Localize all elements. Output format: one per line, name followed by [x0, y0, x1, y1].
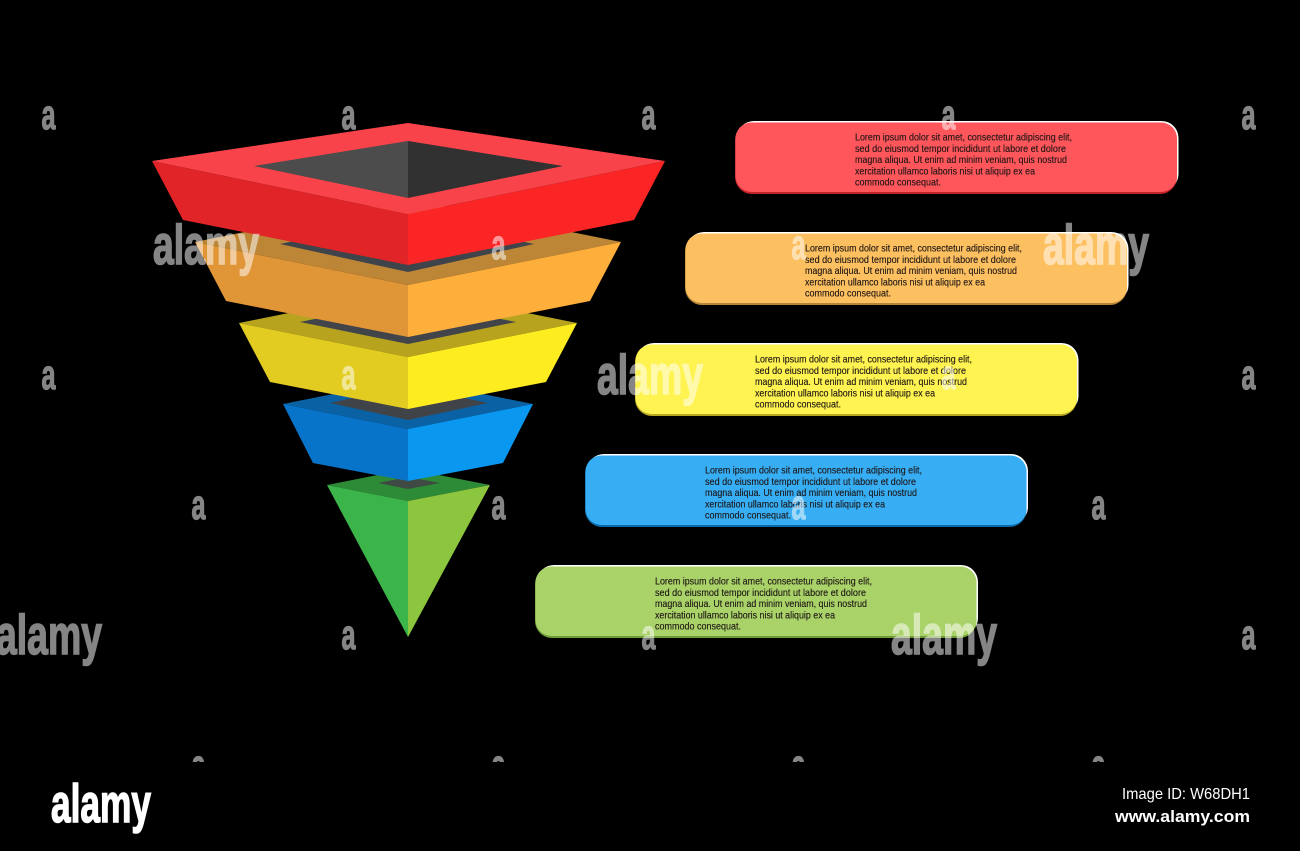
- text block 1: sed do eiusmod tempor incididunt ut labore et dolore: [855, 144, 1066, 155]
- watermarks: a: [642, 91, 656, 138]
- text block 1: commodo consequat.: [855, 178, 941, 189]
- text box 4: blue: [585, 454, 1028, 527]
- watermarks: a: [42, 91, 56, 138]
- watermarks: a: [792, 741, 806, 788]
- watermarks: a: [1242, 351, 1256, 398]
- watermarks: a: [492, 481, 506, 528]
- text block 2: Lorem ipsum dolor sit amet, consectetur adipiscing elit,: [805, 244, 1022, 255]
- watermarks: alamy: [597, 343, 703, 406]
- watermarks: a: [42, 351, 56, 398]
- text box 5: green: [535, 565, 978, 638]
- watermarks: a: [1242, 611, 1256, 658]
- watermarks: a: [1092, 741, 1106, 788]
- funnel tier 1: red: [152, 123, 665, 265]
- watermarks: a: [642, 611, 656, 658]
- text block 5: sed do eiusmod tempor incididunt ut labore et dolore: [655, 588, 866, 599]
- text block 5: Lorem ipsum dolor sit amet, consectetur adipiscing elit,: [655, 577, 872, 588]
- text block 1: Lorem ipsum dolor sit amet, consectetur adipiscing elit,: [855, 133, 1072, 144]
- text block 3: commodo consequat.: [755, 400, 841, 411]
- text block 5: xercitation ullamco laboris nisi ut aliquip ex ea: [655, 610, 835, 622]
- text block 3: [755, 355, 972, 411]
- text block 2: [805, 244, 1022, 300]
- text block 2: sed do eiusmod tempor incididunt ut labore et dolore: [805, 255, 1016, 266]
- text block 5: magna aliqua. Ut enim ad minim veniam, quis nostrud: [655, 599, 867, 610]
- alamy logo: alamy: [51, 774, 151, 834]
- text block 1: [855, 133, 1072, 189]
- watermarks: a: [492, 741, 506, 788]
- funnel: [152, 123, 665, 637]
- watermarks: a: [342, 351, 356, 398]
- text box 3: yellow: [635, 343, 1078, 416]
- funnel tier 4: blue: [283, 379, 533, 481]
- text block 3: magna aliqua. Ut enim ad minim veniam, quis nostrud: [755, 377, 967, 388]
- funnel tier 5: green: [327, 469, 490, 637]
- watermarks: alamy: [891, 603, 997, 666]
- watermarks: a: [1092, 481, 1106, 528]
- text block 4: Lorem ipsum dolor sit amet, consectetur adipiscing elit,: [705, 466, 922, 477]
- text block 2: xercitation ullamco laboris nisi ut aliquip ex ea: [805, 278, 985, 288]
- text block 5: commodo consequat.: [655, 622, 741, 633]
- funnel tier 2: orange: [195, 199, 621, 337]
- watermarks: a: [192, 481, 206, 528]
- footer band: [0, 762, 1300, 851]
- text block 3: xercitation ullamco laboris nisi ut aliquip ex ea: [755, 388, 935, 400]
- watermarks: [0, 91, 1256, 788]
- watermarks: alamy: [1043, 213, 1149, 276]
- image id: Image ID: W68DH1: [1122, 786, 1250, 803]
- text block 4: [705, 466, 922, 522]
- text block 2: commodo consequat.: [805, 289, 891, 300]
- watermarks: a: [492, 221, 506, 268]
- text block 3: sed do eiusmod tempor incididunt ut labore et dolore: [755, 366, 966, 377]
- text block 1: magna aliqua. Ut enim ad minim veniam, quis nostrud: [855, 155, 1067, 166]
- watermarks: a: [792, 221, 806, 268]
- text block 4: commodo consequat.: [705, 511, 791, 522]
- text block 4: sed do eiusmod tempor incididunt ut labore et dolore: [705, 477, 916, 488]
- text box 1: red: [735, 121, 1178, 194]
- text block 1: xercitation ullamco laboris nisi ut aliquip ex ea: [855, 166, 1035, 178]
- watermarks: a: [942, 91, 956, 138]
- watermarks: a: [942, 351, 956, 398]
- website: www.alamy.com: [1114, 807, 1250, 826]
- text block 3: Lorem ipsum dolor sit amet, consectetur adipiscing elit,: [755, 355, 972, 366]
- watermarks: a: [192, 741, 206, 788]
- text block 4: xercitation ullamco laboris nisi ut aliquip ex ea: [705, 500, 885, 510]
- watermarks: a: [792, 481, 806, 528]
- watermarks: alamy: [0, 603, 102, 666]
- watermarks: alamy: [153, 213, 259, 276]
- watermarks: a: [342, 91, 356, 138]
- watermarks: a: [1242, 91, 1256, 138]
- text block 4: magna aliqua. Ut enim ad minim veniam, quis nostrud: [705, 488, 917, 499]
- text block 5: [655, 577, 872, 633]
- text box 2: orange: [685, 232, 1128, 305]
- text block 2: magna aliqua. Ut enim ad minim veniam, quis nostrud: [805, 266, 1017, 277]
- watermarks: a: [342, 611, 356, 658]
- funnel tier 3: yellow: [239, 289, 577, 409]
